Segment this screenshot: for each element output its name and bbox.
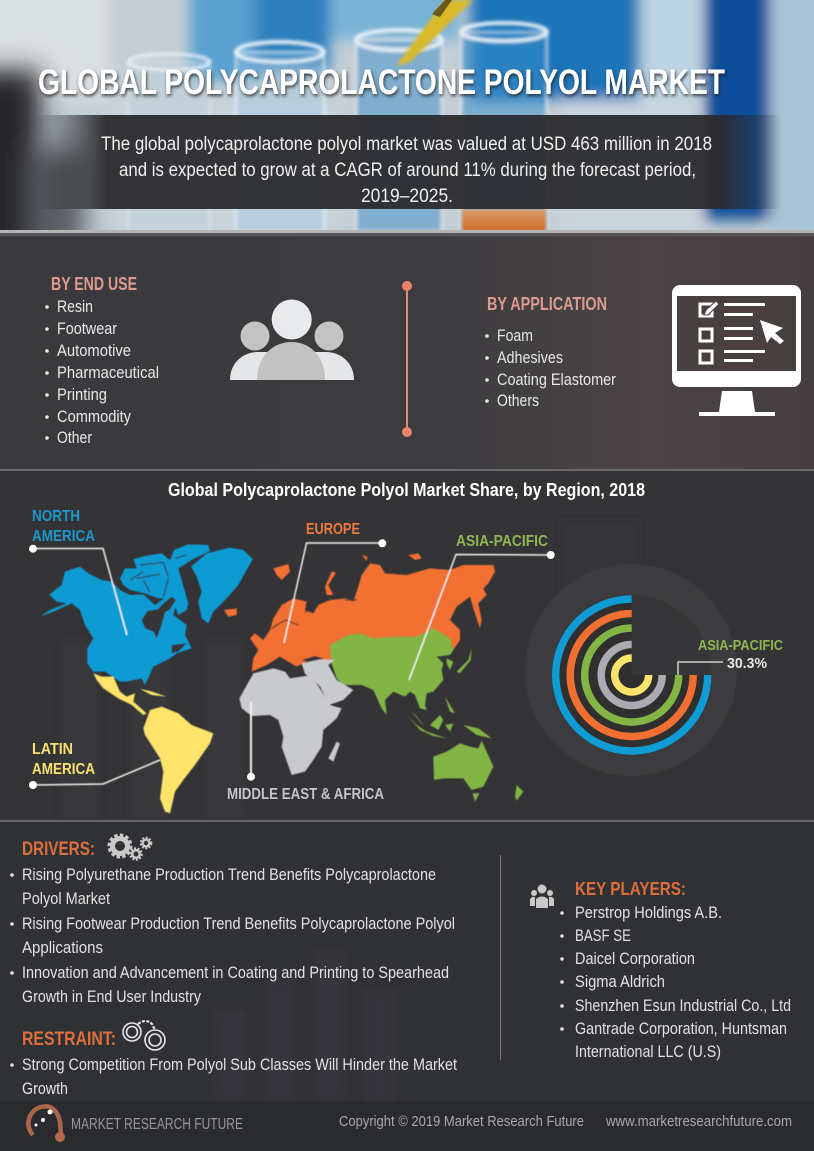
by application list: Adhesives [497, 349, 563, 367]
by end use list: Other [57, 429, 92, 447]
drivers section: Innovation and Advancement in Coating and Printing to Spearhead [22, 964, 449, 982]
region: latin america [93, 673, 213, 813]
key players section: Perstrop Holdings A.B. [575, 904, 722, 922]
region: asia-pacific [330, 628, 523, 802]
key players section: Sigma Aldrich [575, 973, 665, 991]
drivers section: DRIVERS: [22, 839, 95, 860]
by end use list [45, 274, 159, 447]
by end use list: BY END USE [51, 274, 137, 294]
restraint section: RESTRAINT: [22, 1029, 116, 1050]
summary text: and is expected to grow at a CAGR of around 11% during the forecast period, [119, 160, 696, 181]
drivers section: Applications [22, 939, 103, 957]
icon: key players group [530, 884, 554, 908]
drivers section: Rising Polyurethane Production Trend Benefits Polycaprolactone [22, 866, 436, 884]
summary band [0, 115, 814, 209]
region: europe [224, 553, 495, 672]
key players section: BASF SE [575, 927, 631, 945]
region labels: LATIN [32, 741, 73, 758]
summary text: The global polycaprolactone polyol market was valued at USD 463 million in 2018 [101, 134, 712, 155]
by application list: Coating Elastomer [497, 371, 616, 389]
region labels: NORTH [32, 508, 80, 525]
footer: www.marketresearchfuture.com [605, 1113, 792, 1130]
by application list: Others [497, 392, 539, 410]
footer: MARKET RESEARCH FUTURE [71, 1116, 243, 1133]
icon: monitor with checklist [672, 285, 801, 416]
by end use list: Pharmaceutical [57, 364, 159, 382]
panel: regional map [0, 471, 814, 822]
key players section: Gantrade Corporation, Huntsman [575, 1020, 787, 1038]
region: north america [40, 544, 253, 685]
by end use list: Printing [57, 386, 107, 404]
icon: people [230, 300, 354, 380]
by application list: Foam [497, 327, 533, 345]
drivers section [10, 835, 455, 1006]
by end use list: Footwear [57, 320, 117, 338]
by application list: BY APPLICATION [487, 294, 607, 314]
by end use list: Commodity [57, 408, 132, 426]
radial bar chart: 30.3% [727, 656, 767, 672]
by end use list: Resin [57, 298, 93, 316]
restraint section [10, 1021, 457, 1098]
region labels: AMERICA [32, 528, 95, 545]
restraint section: Strong Competition From Polyol Sub Classes Will Hinder the Market [22, 1056, 457, 1074]
by application list [485, 294, 616, 410]
leader lines [33, 543, 551, 785]
panel: drivers, restraint and key players [0, 822, 814, 1101]
region labels: MIDDLE EAST & AFRICA [227, 786, 384, 803]
summary text [101, 134, 712, 207]
logo [28, 1106, 65, 1142]
radial bar chart: ASIA-PACIFIC [698, 638, 783, 654]
summary text: 2019–2025. [361, 186, 453, 207]
radial bar chart [525, 564, 783, 776]
divider with dots [402, 281, 412, 437]
leader dots [29, 539, 555, 789]
region labels: ASIA-PACIFIC [456, 533, 548, 550]
key players section: Daicel Corporation [575, 950, 695, 968]
drivers section: Polyol Market [22, 890, 110, 908]
hero photo background: test tubes [0, 0, 814, 260]
restraint section: Growth [22, 1080, 68, 1098]
region labels [32, 508, 548, 803]
region labels: EUROPE [306, 521, 360, 538]
footer: Copyright © 2019 Market Research Future [339, 1113, 584, 1130]
world map [33, 543, 551, 813]
drivers section: Rising Footwear Production Trend Benefits Polycaprolactone Polyol [22, 915, 455, 933]
icon: handcuffs [123, 1021, 165, 1050]
panel: end use and application [0, 230, 814, 471]
icon: gears [109, 835, 151, 860]
chart title: Global Polycaprolactone Polyol Market Share, by Region, 2018 [168, 480, 645, 500]
key players section [530, 878, 791, 1061]
region labels: AMERICA [32, 761, 95, 778]
drivers section: Growth in End User Industry [22, 988, 202, 1006]
by end use list: Automotive [57, 342, 131, 360]
key players section: International LLC (U.S) [575, 1043, 721, 1061]
key players section: KEY PLAYERS: [575, 878, 686, 899]
footer [0, 1101, 814, 1151]
region: middle east and africa [239, 659, 353, 775]
